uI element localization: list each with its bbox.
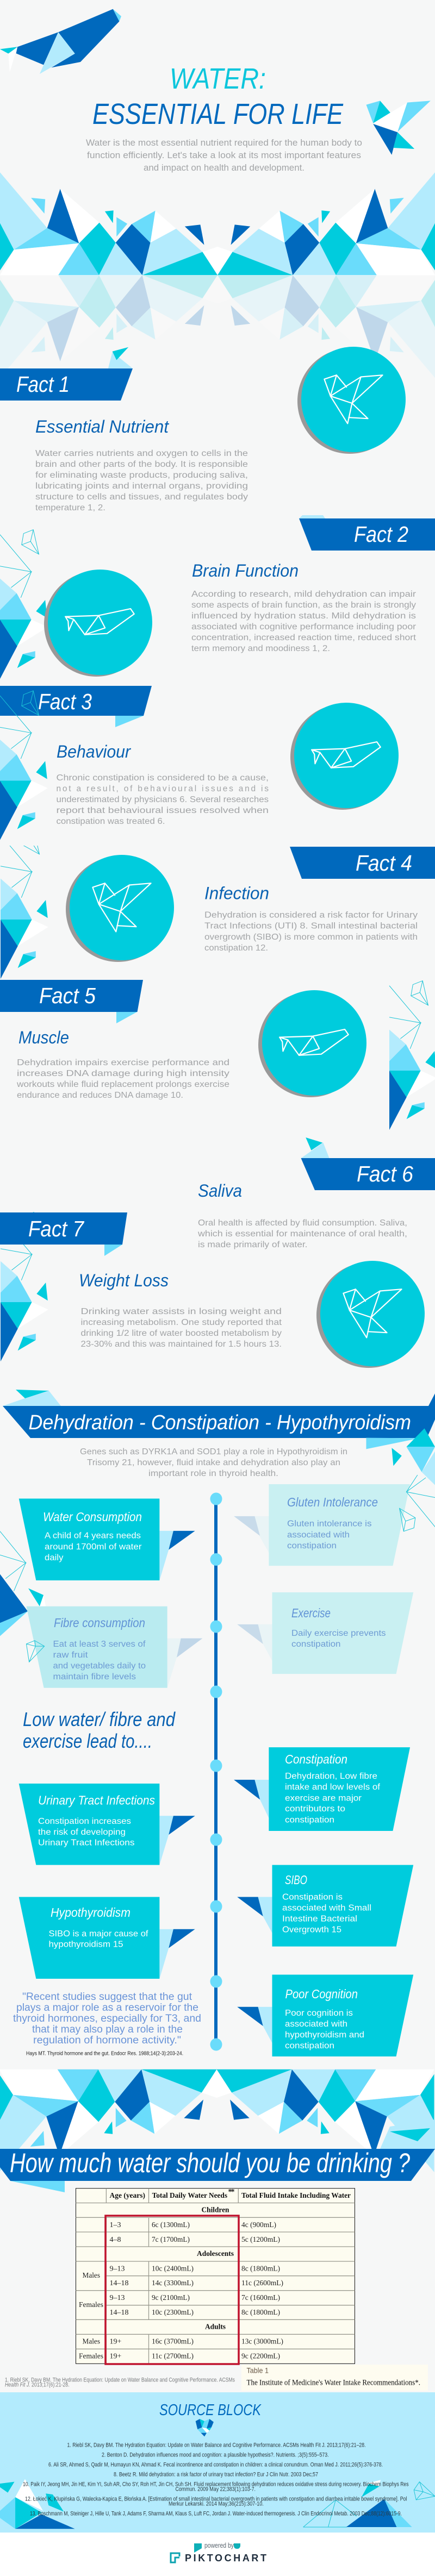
table rows: adolescents: 11c (2600mL)	[241, 2279, 283, 2287]
body text fact 1: temperature 1, 2.	[35, 503, 105, 512]
body text fact 2: associated with cognitive performance including poor	[191, 622, 416, 632]
fact 2 banner	[299, 518, 435, 551]
fact 3 banner	[0, 686, 152, 716]
card: urinary tract infections: Constipation increases	[38, 1817, 131, 1826]
panel: fact 2	[0, 515, 435, 679]
table header: Total Fluid Intake Including Water	[241, 2192, 351, 2200]
source decoration right	[303, 2480, 435, 2527]
table rows: adults: Adults	[205, 2323, 226, 2331]
body text fact 7: drinking 1/2 litre of water boosted metabolism by	[80, 1329, 282, 1338]
body text fact 2	[191, 590, 417, 653]
body text fact 4	[204, 911, 418, 953]
fold under fact 5 banner	[116, 1012, 137, 1023]
card: constipation: Dehydration, Low fibre	[285, 1772, 377, 1781]
body text fact 3	[57, 773, 269, 826]
fact 7 banner	[0, 1212, 127, 1245]
table rows: adolescents: 14c (3300mL)	[152, 2279, 194, 2287]
body text fact 7: 23-30% and this was maintained for 1.5 hours 13.	[80, 1340, 282, 1349]
card: poor cognition: hypothyroidism and	[285, 2030, 364, 2040]
panel: fact 5	[0, 980, 435, 1130]
source title: SOURCE BLOCK	[159, 2402, 262, 2419]
card: hypothyroidism: SIBO is a major cause of	[49, 1929, 148, 1939]
fact 2 label: Fact 2	[354, 522, 408, 547]
body text fact 2: concentration, increased reaction time, reduced short	[191, 633, 417, 642]
fact 4 banner	[290, 847, 435, 879]
heading: weight loss: Weight Loss	[79, 1271, 169, 1290]
body text fact 3: report that behavioural issues resolved when	[57, 806, 269, 815]
section intro text: important role in thyroid health.	[148, 1469, 278, 1478]
fact 7 label: Fact 7	[28, 1216, 85, 1241]
card: sibo: Constipation is	[282, 1892, 343, 1902]
table rows: children	[110, 2206, 280, 2244]
source references	[23, 2442, 409, 2517]
decorative polygon cluster left	[0, 530, 48, 679]
body text fact 5: increases DNA damage during high intensity	[17, 1069, 229, 1078]
table header: **	[228, 2188, 235, 2196]
section intro text: Genes such as DYRK1A and SOD1 play a role in Hypothyroidism in	[80, 1447, 347, 1456]
table caption: Table 1	[247, 2366, 269, 2375]
card: gluten intolerance: Gluten intolerance is	[287, 1520, 372, 1528]
timeline	[210, 1492, 222, 2051]
body text fact 2: some aspects of brain function, as the brain is strongly	[191, 601, 416, 610]
fact 3 label: Fact 3	[38, 689, 92, 714]
card: water consumption: A child of 4 years needs	[45, 1531, 141, 1540]
card: sibo: Overgrowth 15	[282, 1925, 341, 1935]
banner shape	[3, 1406, 435, 1438]
fact 5 banner	[0, 980, 143, 1012]
source decoration left	[0, 2479, 75, 2529]
heading: saliva: Saliva	[198, 1181, 242, 1201]
source references: 8. Beetz R. Mild dehydration: a risk factor of urinary tract infection? Eur J Clin Nutr. 2003 Dec;57	[114, 2472, 318, 2478]
card: hypothyroidism: hypothyroidism 15	[49, 1940, 123, 1949]
icon: bird circle	[316, 1261, 425, 1368]
card: poor cognition: Poor cognition is	[285, 2009, 353, 2018]
body text fact 5: workouts while fluid replacement prolongs exercise	[16, 1080, 229, 1089]
powered by label: powered by	[204, 2541, 234, 2549]
banner decoration right	[366, 1428, 435, 1485]
body text fact 3: constipation was treated 6.	[57, 817, 165, 826]
decorative polygon cluster left	[1, 1212, 48, 1361]
card: urinary tract infections: the risk of developing	[38, 1828, 126, 1837]
table rows: adolescents: 9c (2100mL)	[152, 2294, 190, 2302]
card: sibo: associated with Small	[282, 1903, 371, 1913]
table rows: children: 4–8	[110, 2236, 121, 2244]
card: exercise: Daily exercise prevents	[291, 1629, 386, 1638]
source references: Commun. 2009 May 22;383(1):103-7.	[175, 2486, 256, 2493]
card: exercise: constipation	[291, 1640, 340, 1649]
card: exercise	[237, 1592, 413, 1674]
piktochart wordmark: PIKTOCHART	[185, 2553, 266, 2564]
card: fibre consumption: raw fruit	[53, 1650, 88, 1660]
table rows: adolescents: 9–13	[110, 2294, 125, 2302]
banner: how much water	[0, 2148, 435, 2192]
card: poor cognition	[237, 1975, 413, 2056]
table rows: adults: 11c (2700mL)	[152, 2353, 194, 2361]
card: fibre consumption: Eat at least 3 serves of	[53, 1640, 146, 1649]
fact 6 banner	[301, 1158, 435, 1190]
icon: shield	[234, 2543, 240, 2549]
polygon mountain range inverted	[0, 2069, 435, 2172]
body text fact 7: increasing metabolism. One study reported that	[80, 1318, 282, 1327]
card: gluten intolerance	[234, 1484, 410, 1566]
icon: piktochart logo	[171, 2553, 179, 2562]
table rows: adults: 9c (2200mL)	[241, 2353, 280, 2361]
table rows: children: 4c (900mL)	[241, 2221, 276, 2229]
card: water consumption: daily	[45, 1553, 64, 1562]
heading: essential nutrient: Essential Nutrient	[35, 417, 169, 436]
body text fact 6: Oral health is affected by fluid consumption. Saliva,	[198, 1218, 407, 1228]
panel: fact 6	[197, 1137, 435, 1249]
table background	[76, 2189, 355, 2364]
table rows: adults: Males	[83, 2338, 100, 2346]
icon: whale circle	[44, 570, 152, 677]
source references: 2. Benton D. Dehydration influences mood and cognition: a plausible hypothesis?. Nutrients. ;3(5):555–573.	[102, 2452, 329, 2459]
body text fact 1: for eliminating waste products, producing saliva,	[35, 471, 248, 480]
icon: bird circle	[297, 347, 406, 454]
table rows: adolescents: 14–18	[110, 2279, 128, 2287]
table citation	[5, 2377, 235, 2389]
quote: regulation of hormone activity."	[33, 2035, 181, 2046]
body text fact 2: term memory and moodiness 1, 2.	[191, 644, 330, 653]
panel: source block	[0, 2392, 435, 2533]
fact 1 banner	[0, 368, 133, 401]
body text fact 6: is made primarily of water.	[198, 1240, 308, 1249]
card: fibre consumption: and vegetables daily to	[53, 1661, 146, 1671]
panel: fact 4	[0, 846, 435, 979]
section banner: dehydration constipation hypothyroidism	[3, 1390, 435, 1485]
body text fact 7	[80, 1307, 282, 1349]
heading: infection: Infection	[204, 884, 269, 903]
fact 6 label: Fact 6	[357, 1161, 413, 1186]
source references: Merkur Lekarski. 2014 May;36(215):307-10.	[169, 2501, 264, 2508]
section intro text: Trisomy 21, however, fluid intake and dehydration also play an	[87, 1458, 340, 1467]
card: poor cognition: Poor Cognition	[285, 1987, 358, 2001]
card: urinary tract infections	[19, 1784, 195, 1865]
icon: bird circle	[66, 855, 174, 962]
card: water consumption	[19, 1499, 195, 1580]
quote: thyroid hormones, especially for T3, and	[13, 2013, 201, 2024]
table rows: adolescents: 10c (2300mL)	[152, 2309, 194, 2317]
polygon mountain range with reflection	[0, 172, 435, 378]
card: sibo: Intestine Bacterial	[282, 1915, 357, 1924]
quote citation: Hays MT. Thyroid hormone and the gut. Endocr Res. 1988;14(2-3):203-24.	[26, 2051, 183, 2056]
card: hypothyroidism	[19, 1897, 195, 1979]
table rows: adolescents: Adolescents	[197, 2250, 234, 2258]
banner folds top left	[3, 1390, 435, 1406]
panel: fact 1	[0, 347, 406, 512]
table rows: adolescents: Females	[79, 2301, 103, 2309]
body text fact 1: lubricating joints and internal organs, providing	[35, 482, 248, 491]
table rows: children: 1–3	[110, 2221, 121, 2229]
body text fact 4: Dehydration is considered a risk factor for Urinary	[204, 911, 418, 920]
source references: 1. Riebl SK, Davy BM. The Hydration Equation: Update on Water Balance and Cognitive Performance. ACSMs Health Fit J. 2013;17(6):21–28.	[67, 2442, 365, 2449]
body text fact 1	[35, 449, 248, 512]
table header	[110, 2188, 351, 2200]
body text fact 3: Chronic constipation is considered to be a cause,	[57, 773, 269, 783]
fold under banner	[10, 2181, 65, 2192]
table rows: adolescents: 14–18	[110, 2309, 128, 2317]
red highlight box	[105, 2216, 239, 2364]
decorative polygon cluster left	[0, 846, 48, 979]
table rows: adults: 13c (3000mL)	[241, 2338, 283, 2346]
intro text: function efficiently. Let's take a look at its most important features	[87, 150, 361, 160]
title: WATER:	[170, 62, 266, 95]
heading: behaviour: Behaviour	[57, 742, 131, 761]
heading: brain function: Brain Function	[192, 561, 299, 580]
card: constipation: exercise are major	[285, 1793, 362, 1803]
table rows: adolescents: 8c (1800mL)	[241, 2309, 280, 2317]
table rows: adolescents	[79, 2250, 283, 2317]
table rows: adults: 19+	[110, 2353, 122, 2361]
table rows: adolescents: 9–13	[110, 2265, 125, 2273]
card: constipation: Constipation	[285, 1752, 347, 1766]
table rows: children: Children	[201, 2206, 229, 2215]
title	[92, 62, 344, 130]
banner title: Dehydration - Constipation - Hypothyroidism	[28, 1411, 411, 1434]
card: gluten intolerance: associated with	[287, 1530, 350, 1540]
panel: fact 3	[0, 686, 399, 840]
footer background	[0, 2533, 435, 2576]
card: fibre consumption: Fibre consumption	[54, 1616, 145, 1630]
card: gluten intolerance: Gluten Intolerance	[287, 1495, 378, 1509]
table caption	[241, 2365, 428, 2391]
table rows: adolescents: Males	[83, 2272, 100, 2280]
body text fact 5: endurance and reduces DNA damage 10.	[17, 1091, 183, 1100]
table rows: children: 7c (1700mL)	[152, 2236, 190, 2244]
icon: whale circle	[258, 990, 366, 1097]
fold above fact 2 banner	[299, 515, 325, 518]
card: fibre consumption: maintain fibre levels	[53, 1672, 136, 1681]
body text fact 4: overgrowth (SIBO) is more common in patients with	[204, 933, 418, 942]
card: water consumption: around 1700ml of water	[45, 1542, 141, 1552]
card: urinary tract infections: Urinary Tract Infections	[38, 1838, 135, 1848]
body text fact 6: which is essential for maintenance of oral health,	[197, 1229, 407, 1239]
table rows: children: 5c (1200mL)	[241, 2236, 280, 2244]
card: poor cognition: associated with	[285, 2019, 347, 2029]
card: poor cognition: constipation	[285, 2041, 334, 2050]
water needs table	[76, 2188, 355, 2364]
title: ESSENTIAL FOR LIFE	[92, 98, 344, 130]
intro text: Water is the most essential nutrient required for the human body to	[86, 137, 362, 148]
table grid	[76, 2189, 355, 2364]
quote	[13, 1991, 201, 2046]
intro text	[86, 137, 362, 173]
card: constipation	[234, 1747, 410, 1831]
decorative polygon cluster right	[389, 981, 435, 1130]
left side decoration	[0, 1531, 46, 1636]
origami whale decoration	[0, 9, 121, 74]
body text fact 6	[197, 1218, 407, 1249]
footer: powered by piktochart	[0, 2533, 435, 2576]
card: urinary tract infections: Urinary Tract Infections	[38, 1793, 155, 1808]
card: sibo: SIBO	[285, 1873, 307, 1887]
body text fact 7: Drinking water assists in losing weight and	[80, 1307, 282, 1316]
body text fact 4: Tract Infections (UTI) 8. Small intestinal bacterial	[204, 922, 418, 930]
section intro text	[80, 1447, 347, 1478]
quote: plays a major role as a reservoir for the	[16, 2002, 198, 2014]
card: gluten intolerance: constipation	[287, 1541, 337, 1550]
body text fact 1: structure to cells and tissues, and regulates body	[35, 492, 248, 502]
table rows: adolescents: 10c (2400mL)	[152, 2265, 194, 2273]
icon: whale circle	[290, 703, 399, 810]
fact 5 label: Fact 5	[39, 983, 96, 1008]
body text fact 5	[16, 1058, 229, 1100]
table citation: Health Fit J. 2013;17(6):21-28.	[5, 2382, 70, 2389]
quote: that it may also play a role in the	[32, 2024, 183, 2035]
quote: "Recent studies suggest that the gut	[22, 1991, 192, 2003]
card: constipation: intake and low levels of	[285, 1783, 381, 1792]
intro text: and impact on health and development.	[144, 162, 304, 173]
panel: fact 7	[0, 1212, 425, 1368]
card: hypothyroidism: Hypothyroidism	[51, 1905, 130, 1920]
table rows: adults: 16c (3700mL)	[152, 2338, 194, 2346]
table citation: 1. Riebl SK, Davy BM. The Hydration Equation: Update on Water Balance and Cognitive Performance. ACSMs	[5, 2377, 235, 2384]
table header: Total Daily Water Needs	[152, 2192, 228, 2200]
fold under fact 3 banner	[115, 716, 144, 727]
body text fact 3: underestimated by physicians 6. Several researches	[57, 795, 269, 804]
source block background	[0, 2392, 435, 2533]
body text fact 4: constipation 12.	[204, 943, 268, 953]
subheading: low water fibre and exercise: Low water/ fibre and	[23, 1708, 176, 1730]
fold above fact 1 banner	[108, 347, 133, 368]
card: fibre consumption	[26, 1606, 202, 1688]
card: constipation: constipation	[285, 1815, 334, 1825]
fact 1 label: Fact 1	[16, 372, 70, 397]
body text fact 3: not a result, of behavioural issues and is	[57, 784, 269, 793]
table rows: adolescents: 7c (1600mL)	[241, 2294, 280, 2302]
right side wireframe decoration	[400, 1475, 435, 1531]
icon: flag	[194, 2543, 202, 2553]
body text fact 1: Water carries nutrients and oxygen to cells in the	[35, 449, 248, 458]
banner shape	[0, 2149, 435, 2181]
fold above fact 6 banner	[301, 1137, 330, 1158]
heading: muscle: Muscle	[18, 1028, 69, 1047]
card: water consumption: Water Consumption	[43, 1510, 142, 1524]
decorative polygon cluster over banner	[0, 691, 48, 840]
subheading: low water fibre and exercise: exercise lead to....	[23, 1730, 152, 1752]
table header: Age (years)	[110, 2192, 145, 2200]
fact 4 label: Fact 4	[356, 851, 412, 876]
body text fact 2: influenced by hydration status. Mild dehydration is	[191, 611, 416, 621]
table rows: adults: Females	[79, 2353, 103, 2361]
card: exercise: Exercise	[291, 1606, 331, 1620]
table rows: adults: 19+	[110, 2338, 122, 2346]
subheading: low water fibre and exercise	[23, 1708, 176, 1752]
table rows: adults	[79, 2323, 283, 2361]
origami bird decoration	[366, 101, 431, 155]
body text fact 5: Dehydration impairs exercise performance and	[17, 1058, 229, 1067]
card: sibo	[237, 1865, 413, 1947]
icon: polygon heart	[196, 2419, 214, 2436]
body text fact 2: According to research, mild dehydration can impair	[191, 590, 416, 599]
fold under fact 7 banner	[104, 1245, 122, 1256]
table rows: adolescents: 8c (1800mL)	[241, 2265, 280, 2273]
card: constipation: contributors to	[285, 1804, 345, 1814]
body text fact 1: brain and other parts of the body. It is responsible	[35, 460, 248, 469]
table rows: children: 6c (1300mL)	[152, 2221, 190, 2229]
